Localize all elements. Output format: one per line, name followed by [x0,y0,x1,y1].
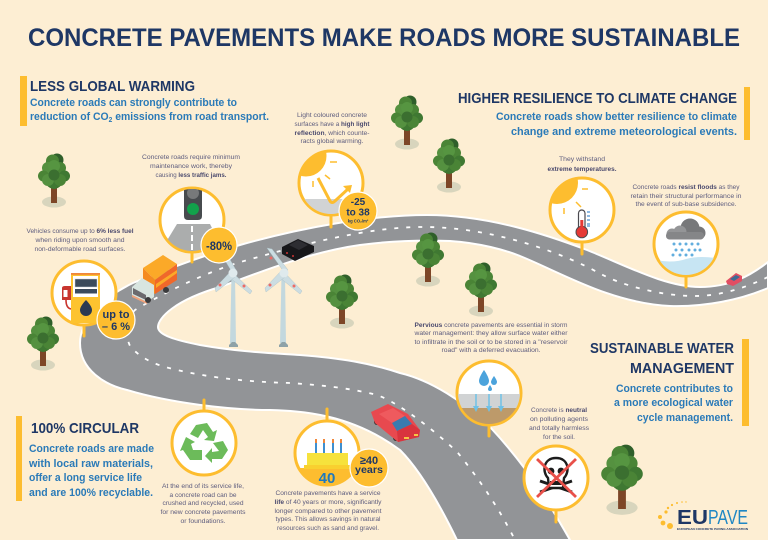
text: service life: longer compared to other pavement [274,508,382,515]
panel: higher resilience to climate change [458,87,750,140]
badge: -25 to 38 [339,192,377,230]
text: fuel: non-deformable road surfaces. [34,246,126,253]
text: temperatures: They withstand [559,156,605,163]
text: service life: resources such as sand and gravel. [277,525,379,532]
panel: less global warming: emissions from road transport. [112,111,269,123]
text: light reflection: surfaces have a high light [294,121,370,128]
text: temperatures [548,156,617,173]
panel: 100% circular [16,416,154,501]
text: neutral: on polluting agents [530,416,588,423]
panel: sustainable water management: a more ecological water [614,397,734,409]
callout: flood cloud [650,212,722,287]
text: floods: Concrete roads resist floods as they [632,184,740,191]
panel: less global warming [20,76,269,126]
callout: cake [295,409,359,488]
text: pervious [413,322,568,354]
tree [433,138,465,192]
text: neutral [529,407,589,441]
callout: cake: 40 [319,470,335,487]
logo: EUPAVE: EU [677,507,708,529]
panel: higher resilience to climate change: change and extreme meteorological events. [511,126,737,138]
callout: fuel pump [52,261,116,336]
tree [326,274,358,328]
text: light reflection [294,112,370,145]
text: light reflection: reflection, which counte- [294,130,370,137]
logo: EUPAVE: EUROPEAN CONCRETE PAVING ASSOCIATION [677,527,748,531]
text: traffic jams: Concrete roads require minimum [142,154,240,161]
panel: sustainable water management: Concrete contributes to [616,383,733,395]
text: service life: Concrete pavements have a service [276,490,381,497]
tree [38,154,70,208]
badge: up to -6%: up to [103,309,130,321]
text: recycling: At the end of its service life, [162,483,244,490]
badge: -80%: -80% [206,239,232,253]
callout: sun reflection [298,150,364,228]
text: recycling: for new concrete pavements [160,509,246,516]
panel: higher resilience to climate change: Concrete roads show better resilience to climate [496,111,737,123]
badge: >=40 years: ≥40 [360,455,378,467]
panel: less global warming: LESS GLOBAL WARMING [30,78,195,95]
panel: 100% circular: with local raw materials, [28,458,153,470]
icon: big red car [371,404,420,442]
text: light reflection: racts global warming. [300,138,364,145]
badge: >=40 years: years [355,465,383,476]
text: recycling: or foundations. [180,518,226,525]
text: fuel: Vehicles consume up to 6% less fuel [26,228,134,235]
badge: -25 to 38: to 38 [346,208,370,218]
logo: EUPAVE: PAVE [708,507,748,529]
panel: sustainable water management [590,339,749,426]
text: fuel [26,228,134,253]
icon: small red car [726,273,742,286]
panel: sustainable water management: MANAGEMENT [630,360,734,377]
panel: 100% circular: offer a long service life [29,472,142,484]
text: pervious: to infiltrate in the soil or to be stored in a "reservoir [414,339,568,346]
text: service life: life of 40 years or more, significantly [274,499,382,506]
road [80,215,768,540]
tree [601,445,643,515]
panel: less global warming: Concrete roads can strongly contribute to [30,97,237,109]
panel: less global warming: 2 [109,117,112,124]
text: service life [274,490,382,532]
text: service life: types. This allows savings in natural [276,516,380,523]
title: CONCRETE PAVEMENTS MAKE ROADS MORE SUSTAINABLE [28,24,740,52]
text: recycling: crushed and recycled, used [162,500,244,507]
text: recycling [160,483,246,525]
text: floods: the event of sub-base subsidence. [636,201,737,208]
panel: less global warming: reduction of CO [30,111,113,123]
callout: thermometer [548,176,616,256]
panel: 100% circular: Concrete roads are made [29,443,154,455]
tree [391,96,423,150]
badge: up to -6% [97,301,135,339]
text: traffic jams: causing less traffic jams. [156,172,227,179]
text: light reflection: Light coloured concrete [297,112,367,119]
text: pervious: water management: they allow surface water either [413,330,568,337]
callout: water infiltration [456,361,522,436]
icon: truck [132,255,177,304]
badge: -25 to 38: -25 [351,197,366,208]
text: traffic jams [142,154,240,179]
text: recycling: a concrete road can be [170,492,237,499]
text: pervious: road" with a deferred evacuation. [442,347,541,354]
text: neutral: for the soil. [543,434,575,441]
text: neutral: Concrete is neutral [531,407,587,414]
callout: traffic light [160,185,224,262]
badge: up to -6%: – 6 % [102,321,130,333]
tree [412,232,444,286]
icon: black car [282,239,314,261]
text: temperatures: extreme temperatures. [548,166,617,173]
panel: 100% circular: and are 100% recyclable. [29,487,153,499]
text: neutral: and totally harmless [529,425,589,432]
text: pervious: Pervious concrete pavements are essential in storm [414,322,568,329]
icon: wind turbines [215,248,302,347]
panel: sustainable water management: cycle management. [637,412,733,424]
badge: -25 to 38: kg CO₂/m² [348,218,369,224]
tree [465,262,497,316]
logo: EUPAVE [658,501,748,531]
callout: recycling [172,400,236,475]
panel: sustainable water management: SUSTAINABLE WATER [590,340,734,357]
text: floods: retain their structural performance in [630,193,742,200]
tree [27,316,59,370]
text: traffic jams: maintenance work, thereby [150,163,233,170]
panel: higher resilience to climate change: HIGHER RESILIENCE TO CLIMATE CHANGE [458,90,737,107]
text: floods [630,184,742,208]
text: fuel: when riding upon smooth and [34,237,125,244]
callout: skull [524,446,588,522]
badge: >=40 years [350,449,388,487]
badge: -80% [201,227,237,263]
panel: 100% circular: 100% CIRCULAR [31,420,139,437]
